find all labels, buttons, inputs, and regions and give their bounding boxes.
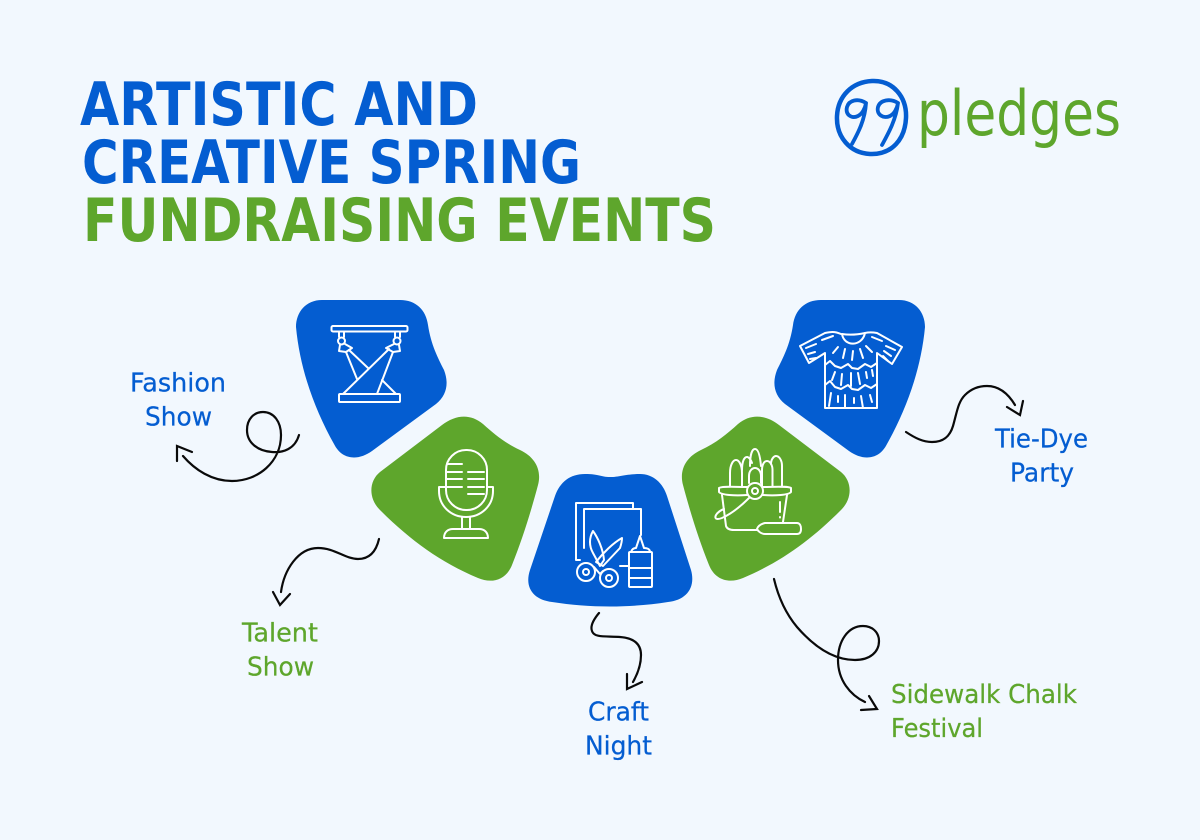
arrow: talent show <box>273 539 379 605</box>
arrow: sidewalk chalk festival <box>774 579 879 710</box>
logo: 99pledges: pledges <box>917 77 1121 150</box>
title: CREATIVE SPRING <box>82 128 581 198</box>
panel: talent show <box>371 417 539 581</box>
label: sidewalk chalk festival: Sidewalk Chalk <box>891 680 1077 710</box>
label: fashion show: Fashion <box>130 369 226 399</box>
panel: fashion show <box>296 300 447 457</box>
title: FUNDRAISING EVENTS <box>83 186 716 256</box>
label: tie-dye party <box>994 425 1088 489</box>
arrow: fashion show <box>177 412 299 481</box>
panel: sidewalk chalk festival <box>682 417 850 581</box>
title: ARTISTIC AND <box>80 70 478 140</box>
icon: microphone <box>439 450 493 538</box>
label: talent show <box>241 619 318 683</box>
label: sidewalk chalk festival <box>891 680 1077 744</box>
label: fashion show: Show <box>145 403 212 433</box>
icon: stage lights <box>332 326 408 402</box>
arrow: craft night <box>591 613 642 689</box>
label: tie-dye party: Tie-Dye <box>994 425 1088 455</box>
label: talent show: Show <box>247 653 314 683</box>
panel: craft night <box>528 474 692 606</box>
icon: tie-dye shirt <box>800 332 902 408</box>
arrow: tie-dye party <box>906 386 1023 442</box>
icon: paper, scissors and glue <box>576 503 652 587</box>
label: talent show: Talent <box>241 619 318 649</box>
label: craft night <box>585 698 652 762</box>
label: craft night: Craft <box>588 698 649 728</box>
icon: chalk bucket <box>715 449 801 534</box>
label: fashion show <box>130 369 226 433</box>
logo: 99pledges <box>837 77 1121 154</box>
title <box>80 70 716 256</box>
label: craft night: Night <box>585 732 652 762</box>
label: tie-dye party: Party <box>1010 459 1074 489</box>
panel: tie-dye party <box>774 300 925 457</box>
label: sidewalk chalk festival: Festival <box>891 714 983 744</box>
